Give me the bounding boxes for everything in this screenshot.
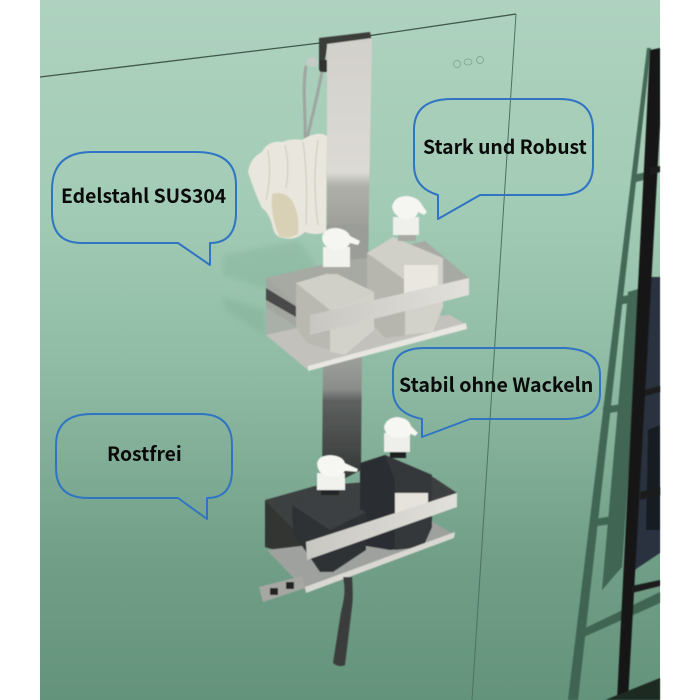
black ladder	[605, 48, 660, 700]
label: Stark und Robust: Stark und Robust	[423, 132, 587, 160]
lower hanger bar	[322, 346, 362, 490]
hanger bar upper	[327, 38, 372, 262]
speech bubble: Stark und Robust	[414, 99, 593, 219]
upper shelf: front band	[310, 278, 469, 335]
lower shelf: bottle right	[360, 417, 432, 550]
lower shelf: front lip	[305, 532, 455, 593]
lower shelf: left wall	[265, 500, 307, 560]
upper shelf	[266, 196, 469, 371]
speech bubble: Rostfrei	[56, 414, 232, 519]
speech bubble: Edelstahl SUS304	[52, 152, 236, 265]
squeegee handle	[333, 577, 353, 666]
hook	[319, 60, 327, 72]
lower shelf: front band	[306, 493, 457, 560]
shelf shadows on wall	[223, 240, 330, 335]
squeegee blade	[259, 576, 305, 602]
upper shelf: bottle left	[296, 228, 374, 355]
upper shelf: interior	[266, 241, 469, 315]
upper shelf: base	[266, 315, 467, 370]
loofah cord	[304, 66, 322, 138]
upper shelf: left wall	[266, 278, 310, 335]
mini certification icons	[454, 56, 484, 68]
lower shelf: bottle left	[292, 455, 366, 572]
dark towel on ladder	[633, 277, 660, 571]
upper shelf: see-through gap	[266, 305, 310, 350]
hanger bracket and cord	[248, 32, 372, 262]
label: Edelstahl SUS304: Edelstahl SUS304	[61, 181, 226, 209]
lower shelf: interior	[265, 477, 457, 542]
upper shelf: front lip	[308, 323, 467, 371]
label: Rostfrei: Rostfrei	[107, 439, 182, 467]
upper shelf: bottle right	[367, 196, 443, 338]
glass panel edges	[40, 14, 516, 700]
lower shelf: base	[267, 520, 455, 590]
upper shelf: bar lower	[327, 225, 368, 262]
cord hook knob	[306, 57, 318, 67]
ladder shadow on wall	[568, 48, 660, 700]
bracket cap	[319, 32, 372, 72]
white loofah	[248, 134, 327, 239]
speech bubble: Stabil ohne Wackeln	[393, 348, 600, 437]
lower shelf	[259, 417, 457, 666]
label: Stabil ohne Wackeln: Stabil ohne Wackeln	[399, 369, 593, 398]
